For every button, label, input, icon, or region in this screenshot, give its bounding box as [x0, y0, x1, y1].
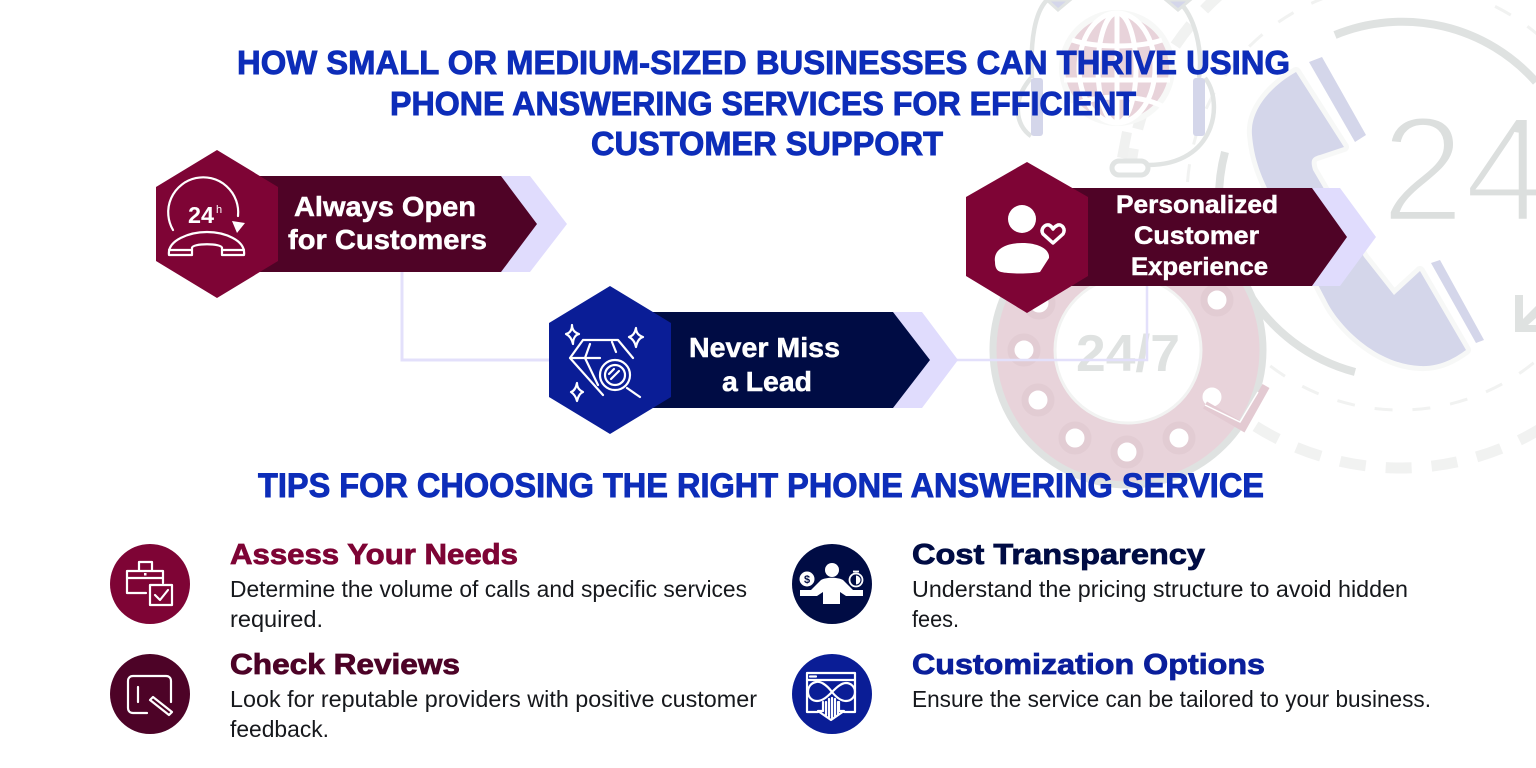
step: Always Open for Customers: Always Open	[294, 191, 476, 222]
tip: Customization Options	[792, 649, 1431, 734]
step: Personalized Customer Experience: Customer	[1134, 222, 1259, 250]
tip: Assess Your Needs: Determine the volume of calls and specific services	[230, 576, 747, 602]
title: CUSTOMER SUPPORT	[591, 125, 943, 162]
background: globe and headset	[1018, 0, 1214, 175]
tip: Check Reviews: Check Reviews	[230, 649, 460, 681]
icon: 24h phone: 24	[188, 202, 214, 228]
background: faded telephone illustrations	[993, 0, 1536, 485]
background: arrow fragment	[1515, 295, 1536, 332]
heading: tips: TIPS FOR CHOOSING THE RIGHT PHONE ANSWERING SERVICE	[258, 467, 1264, 505]
step: Personalized Customer Experience: Personalized	[1116, 191, 1278, 219]
tip: Assess Your Needs: Assess Your Needs	[230, 539, 518, 571]
tip: Cost Transparency: Cost Transparency	[912, 539, 1205, 571]
step: Always Open for Customers: for Customers	[288, 224, 487, 255]
icon: briefcase and checkbox	[127, 562, 172, 605]
tip: Customization Options: Ensure the service can be tailored to your business.	[912, 686, 1431, 712]
tip: Cost Transparency	[792, 539, 1408, 632]
step: Never Miss a Lead	[549, 286, 958, 434]
tip: Assess Your Needs: required.	[230, 606, 323, 632]
background: dial 24/7 text: 24/7	[1076, 325, 1180, 383]
icon: 24h phone	[168, 177, 245, 255]
step: Personalized Customer Experience: Experience	[1131, 253, 1268, 281]
tip: Check Reviews	[110, 649, 757, 742]
step: Never Miss a Lead: Never Miss	[689, 332, 840, 363]
title: HOW SMALL OR MEDIUM-SIZED BUSINESSES CAN THRIVE USING	[237, 44, 1290, 81]
icon: person balancing money and time: $	[804, 574, 810, 586]
icon: 24h phone: h	[216, 204, 222, 216]
tip: Check Reviews: feedback.	[230, 716, 329, 742]
tip: Customization Options: Customization Options	[912, 649, 1265, 681]
tip: Cost Transparency: Understand the pricing structure to avoid hidden	[912, 576, 1408, 602]
icon: screen with pencil	[128, 676, 172, 715]
background: rotary dial	[993, 215, 1266, 485]
title: PHONE ANSWERING SERVICES FOR EFFICIENT	[390, 85, 1136, 122]
icon: infinity window with arrow	[807, 673, 855, 720]
background: large handset	[1252, 57, 1484, 366]
icon: diamond with magnifier	[566, 325, 643, 401]
tip: Assess Your Needs	[110, 539, 747, 632]
step: Personalized Customer Experience	[966, 162, 1376, 313]
connector lines between steps	[402, 272, 1147, 360]
icon: person balancing money and time	[800, 563, 863, 604]
tip: Check Reviews: Look for reputable providers with positive customer	[230, 686, 757, 712]
icon: person with heart	[995, 205, 1064, 274]
background: large phone circle	[1219, 22, 1536, 372]
step: Always Open for Customers	[156, 150, 567, 298]
tip: Cost Transparency: fees.	[912, 606, 959, 632]
background: dashed rings	[1129, 0, 1536, 468]
step: Never Miss a Lead: a Lead	[722, 366, 812, 397]
title	[237, 44, 1290, 162]
